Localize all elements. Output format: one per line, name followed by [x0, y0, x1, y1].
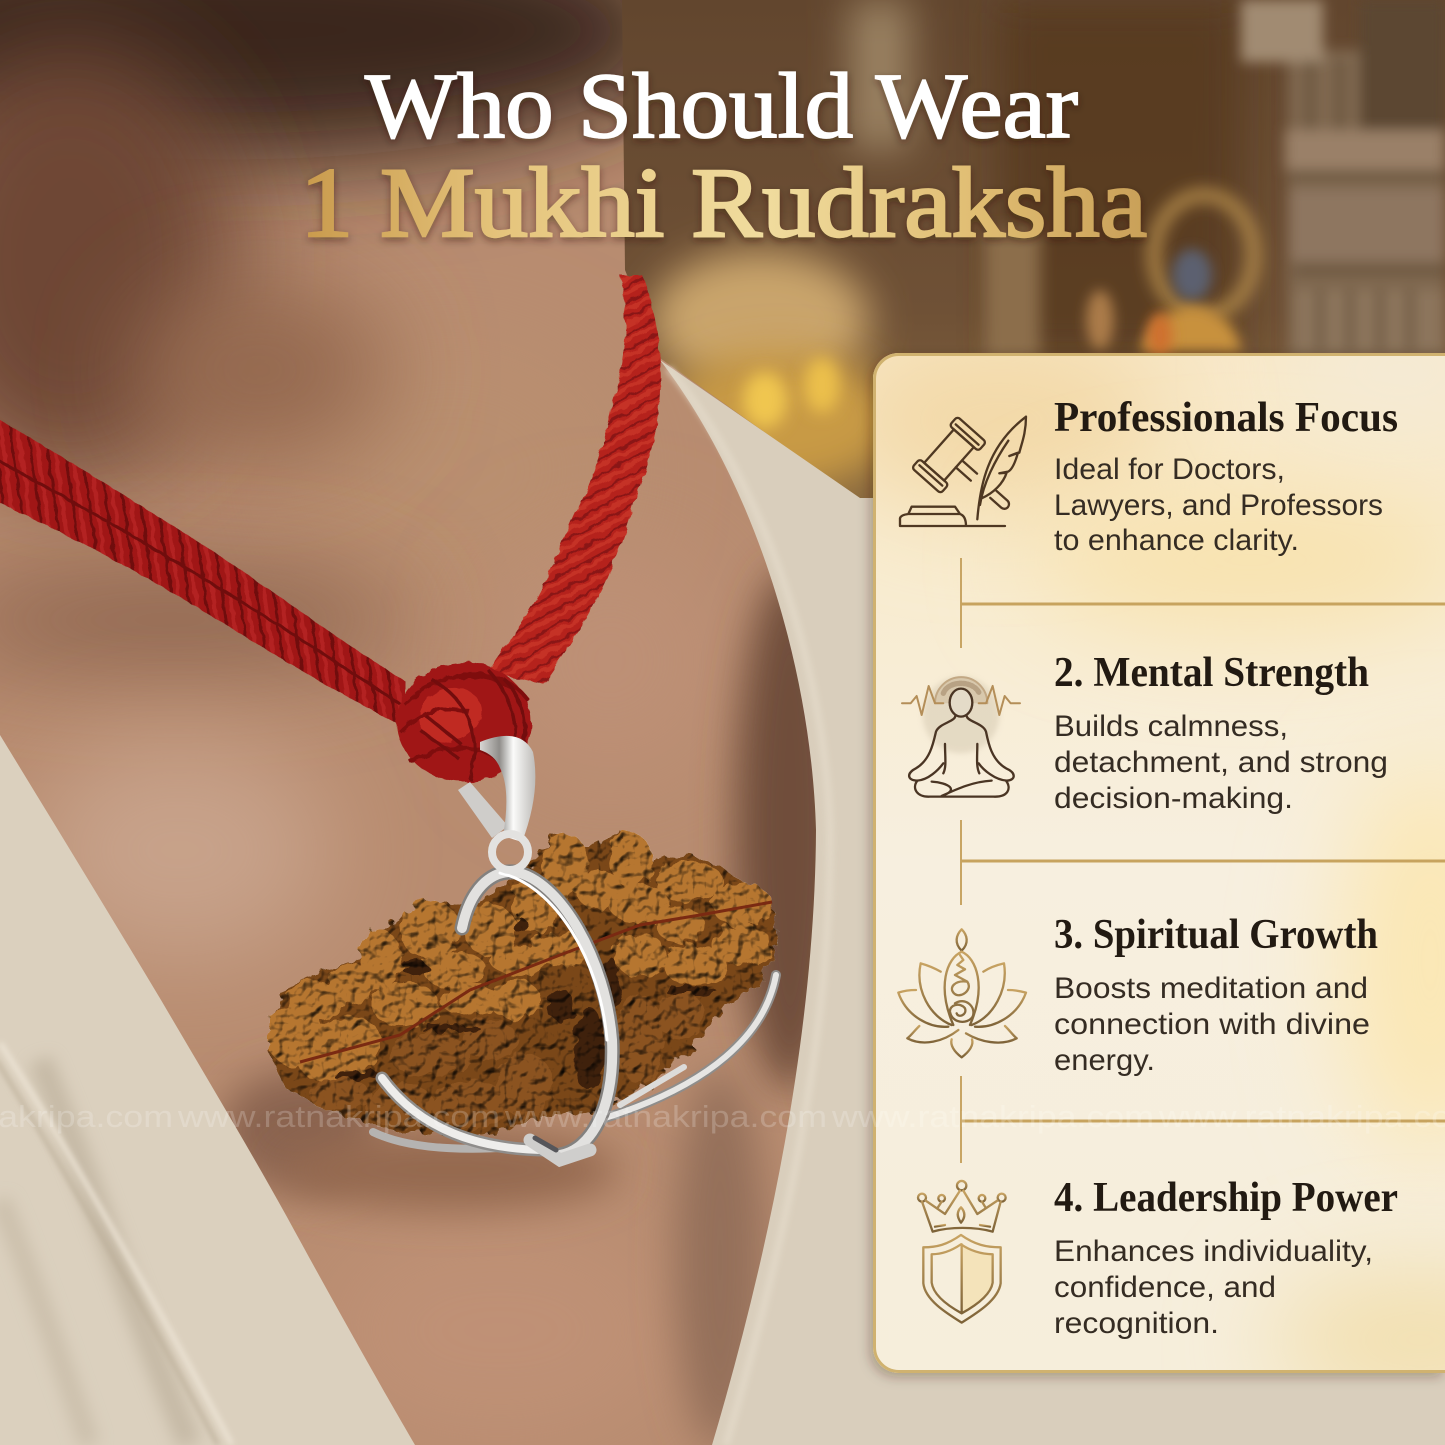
- silver cage: [373, 872, 776, 1160]
- description: connection with divine: [1054, 1008, 1370, 1041]
- description: confidence, and: [1054, 1271, 1276, 1304]
- description: Lawyers, and Professors: [1054, 489, 1383, 522]
- icon: gavel and quill: [900, 416, 1031, 533]
- heading: 4. Leadership Power: [1054, 1175, 1398, 1221]
- carved pillar: [1241, 0, 1445, 360]
- heading: Professionals Focus: [1054, 395, 1398, 441]
- item 3: spiritual growth: [1054, 912, 1378, 1077]
- upper ridge lumps: [267, 832, 772, 1093]
- silver bail: [458, 736, 535, 870]
- shirt: left side: [0, 735, 415, 1445]
- repeating watermark: www.ratnakripa.com: [831, 1099, 1154, 1134]
- repeating watermark: www.ratnakripa.com: [1158, 1099, 1445, 1134]
- rudraksha bead: [267, 832, 778, 1136]
- central red seam: [300, 902, 772, 1062]
- item 2: mental strength: [1054, 650, 1388, 815]
- title: [300, 55, 1147, 258]
- lower dark lumps: [310, 991, 704, 1129]
- panel warm glow: [876, 356, 1445, 1370]
- benefits panel: [830, 330, 1445, 1410]
- repeating watermark: www.ratnakripa.com: [504, 1099, 827, 1134]
- deity figure with halo: [1086, 195, 1254, 357]
- description: decision-making.: [1054, 782, 1293, 815]
- divider connector 3: [961, 1076, 1445, 1163]
- heading: 3. Spiritual Growth: [1054, 912, 1378, 958]
- description: to enhance clarity.: [1054, 524, 1299, 557]
- description: energy.: [1054, 1044, 1155, 1077]
- item 1: professionals focus: [1054, 395, 1398, 557]
- description: [1054, 710, 1388, 815]
- description: recognition.: [1054, 1307, 1219, 1340]
- description: detachment, and strong: [1054, 746, 1388, 779]
- shirt: right side: [660, 360, 1445, 1445]
- cord knot: [397, 662, 531, 782]
- icon: meditating figure with brain halo: [902, 677, 1020, 797]
- heading: 2. Mental Strength: [1054, 650, 1369, 696]
- divider connector 2: [961, 820, 1445, 905]
- divider connector 1: [961, 558, 1445, 648]
- description: Builds calmness,: [1054, 710, 1288, 743]
- description: Boosts meditation and: [1054, 972, 1368, 1005]
- red thread cord: [0, 275, 661, 728]
- icon: lotus with kundalini spiral: [898, 929, 1026, 1057]
- dark crevices: [332, 917, 716, 1092]
- icon: crown and shield: [918, 1181, 1006, 1323]
- repeating watermark: www.ratnakripa.com: [177, 1099, 500, 1134]
- title line 1: Who Should Wear: [365, 55, 1078, 158]
- repeating watermark: [0, 1099, 1445, 1134]
- description: [1054, 453, 1383, 557]
- title line 2: 1 Mukhi Rudraksha: [300, 147, 1147, 258]
- description: Enhances individuality,: [1054, 1235, 1373, 1268]
- description: [1054, 972, 1370, 1077]
- description: Ideal for Doctors,: [1054, 453, 1285, 486]
- blurred temple backdrop: [600, 0, 1445, 520]
- description: [1054, 1235, 1373, 1340]
- item 4: leadership power: [1054, 1175, 1398, 1340]
